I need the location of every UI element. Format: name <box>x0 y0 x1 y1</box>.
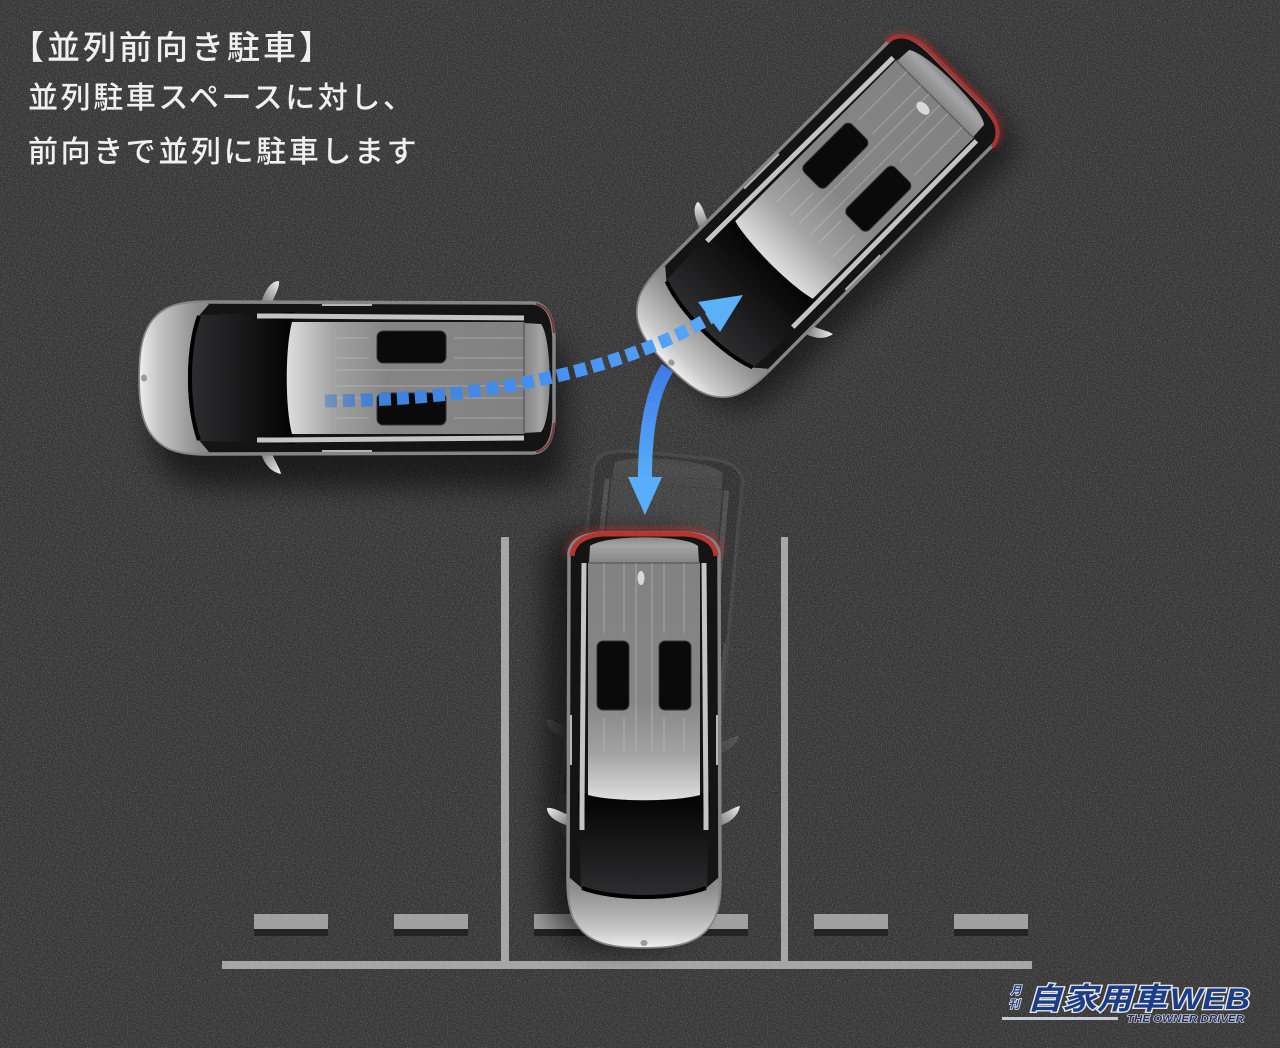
description text: 並列駐車スペースに対し、 <box>28 82 416 115</box>
description text: 前向きで並列に駐車します <box>28 136 419 169</box>
logo: The Owner Driver WEB: 刊 <box>1008 998 1022 1011</box>
car: parked position with red rear glow <box>544 532 740 947</box>
car: angled position with red rear glow <box>601 8 1028 435</box>
logo: The Owner Driver WEB: WEB <box>1170 983 1250 1016</box>
parking bay lines <box>222 537 1032 969</box>
arrow: curved turn into the bay <box>628 364 673 515</box>
logo: The Owner Driver WEB: THE OWNER DRIVER <box>1127 1014 1245 1025</box>
wheel stops <box>254 914 1028 936</box>
ghost of car during manoeuvre <box>534 446 765 876</box>
car: start position, front facing left <box>140 281 566 488</box>
logo: The Owner Driver WEB: 自家用車 <box>1027 983 1172 1016</box>
arrow: dashed forward path <box>325 295 743 401</box>
description text <box>28 82 419 169</box>
logo: The Owner Driver WEB: 月 <box>1010 985 1022 997</box>
logo: The Owner Driver WEB <box>1002 983 1250 1025</box>
title: 【並列前向き駐車】 <box>11 29 335 66</box>
